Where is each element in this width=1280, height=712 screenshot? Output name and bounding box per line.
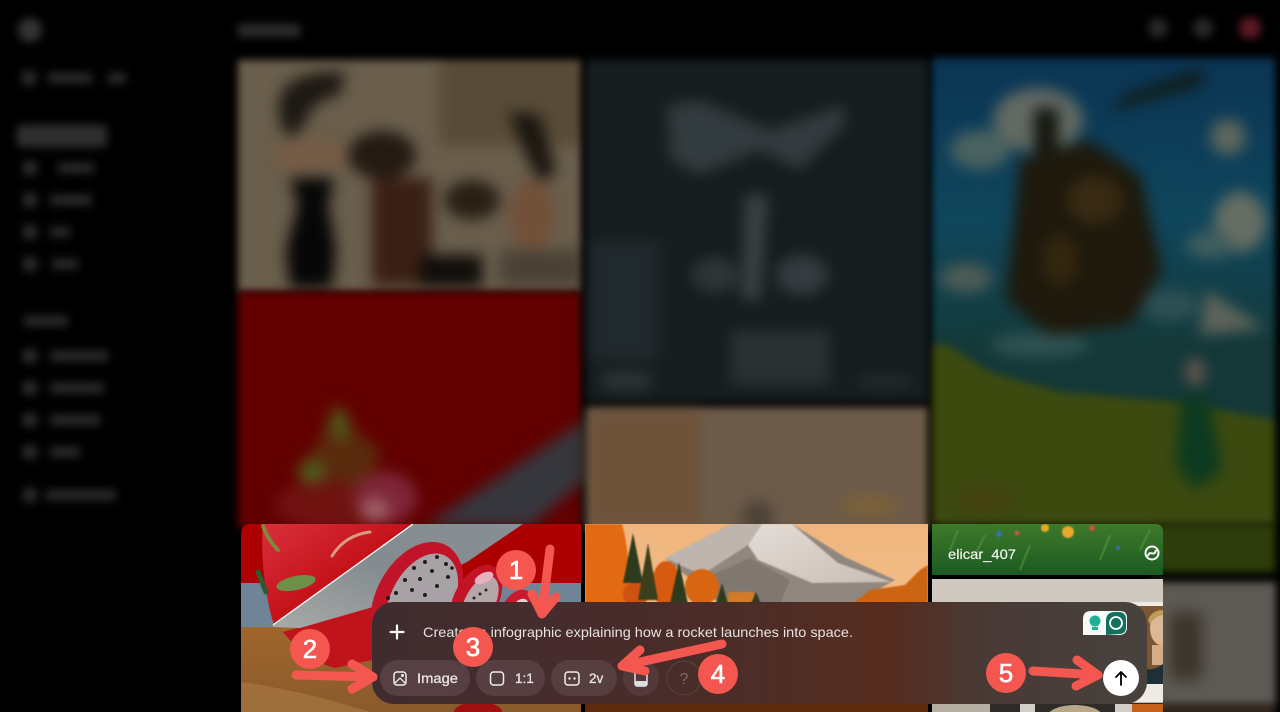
blurred gallery tile: tan landscape — [586, 407, 928, 540]
arrow 5 — [1033, 660, 1098, 686]
badge 4: 4 — [711, 659, 725, 689]
pill: aspect ratio — [476, 660, 545, 696]
blurred sidebar — [17, 18, 126, 502]
tile: gallery wall with portrait — [932, 579, 1172, 712]
badge 3 — [453, 627, 493, 667]
badge 5 — [986, 653, 1026, 693]
badge 1: 1 — [509, 555, 523, 585]
tile: dragon fruit photo — [241, 524, 581, 712]
icon: plus — [390, 626, 404, 638]
prompt panel — [372, 602, 1147, 704]
button: help: ? — [680, 671, 689, 688]
pill: image mode: Image — [417, 671, 458, 686]
blurred lower-right gallery strip — [1150, 524, 1276, 712]
arrow 1 — [532, 549, 556, 614]
badge 2: 2 — [303, 634, 317, 664]
send button — [1103, 660, 1139, 696]
knife blade — [272, 524, 523, 628]
badge 5: 5 — [999, 658, 1013, 688]
arrow 4 — [622, 644, 722, 671]
pill: versions: 2v — [589, 671, 604, 686]
username: elicar_407 — [948, 546, 1016, 562]
blurred gallery tile: dragon fruit — [238, 292, 585, 531]
blurred gallery tile: floating castle — [932, 58, 1275, 525]
blurred gallery tile: dark face — [586, 60, 928, 402]
tile: autumn mountain photo — [585, 524, 928, 712]
button: help — [667, 661, 701, 695]
pill: versions — [551, 660, 617, 696]
badge 1 — [496, 550, 536, 590]
grammarly badge — [1083, 611, 1127, 635]
dragon fruit body — [262, 524, 410, 625]
icon: remix swirl — [1146, 546, 1158, 560]
button: document — [623, 660, 659, 696]
prompt text: Create an infographic explaining how a rocket launches into space. — [423, 624, 853, 640]
tile: meadow with username — [932, 524, 1163, 575]
pill: aspect ratio: 1:1 — [515, 671, 534, 686]
pill: image mode — [380, 660, 470, 696]
blurred top bar — [238, 17, 1261, 39]
arrow 2 — [296, 664, 373, 689]
badge 4 — [698, 654, 738, 694]
badge 2 — [290, 629, 330, 669]
fruit slices — [370, 542, 464, 630]
badge 3: 3 — [466, 632, 480, 662]
blurred gallery tile: vintage figures — [238, 50, 590, 292]
